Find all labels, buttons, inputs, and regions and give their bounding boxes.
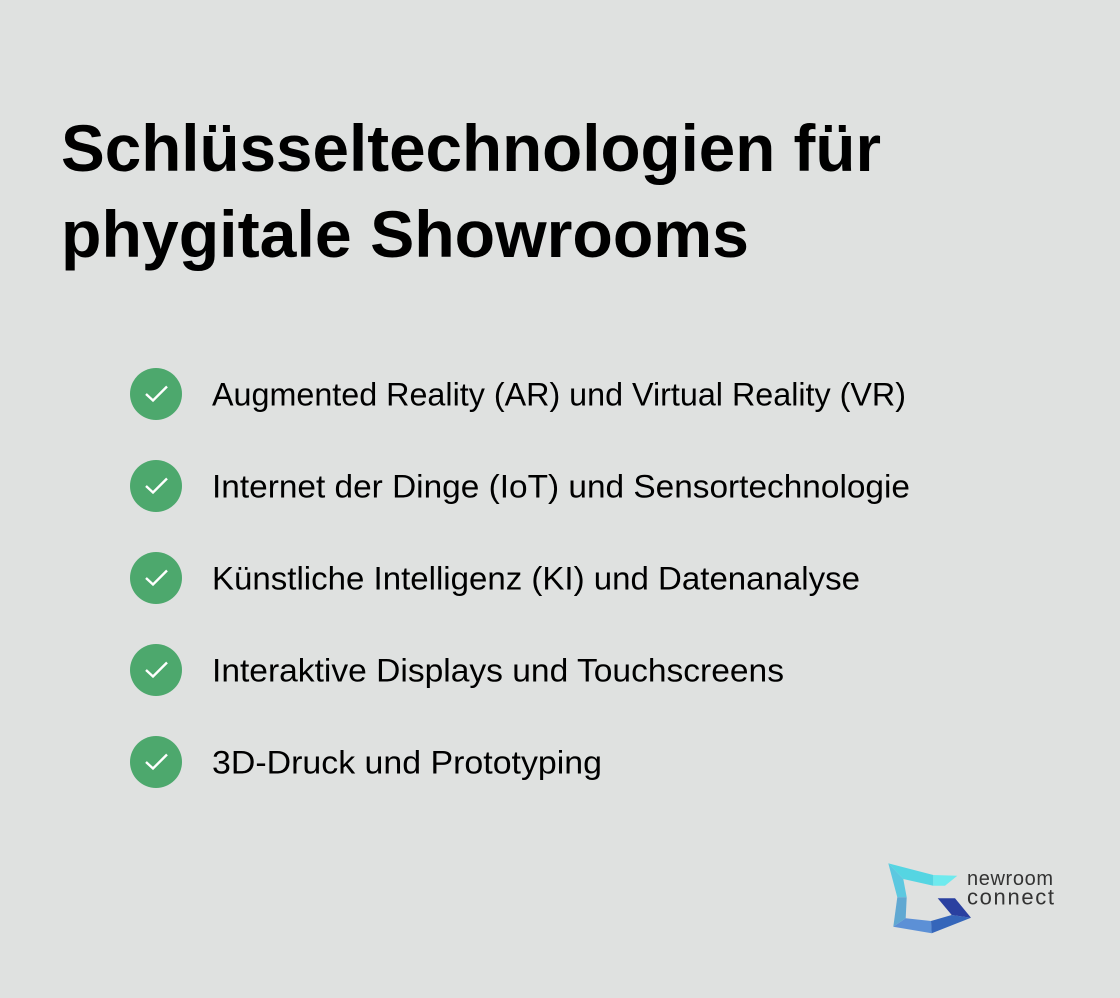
title: Schlüsseltechnologien für [61, 111, 881, 185]
item 4: displays [130, 644, 784, 696]
item 1: AR and VR: Augmented Reality (AR) und Virtual Reality (VR) [212, 376, 906, 412]
item 1: AR and VR [130, 368, 906, 420]
logo: newroom connect: newroom [967, 868, 1053, 890]
item 2: IoT: Internet der Dinge (IoT) und Sensortechnologie [212, 468, 910, 504]
logo: newroom connect [888, 863, 1054, 933]
logo: newroom connect: connect [967, 884, 1054, 910]
item 4: displays: Interaktive Displays und Touchscreens [212, 652, 784, 688]
item 5: 3D printing [130, 736, 602, 788]
item 3: KI [130, 552, 860, 604]
item 2: IoT [130, 460, 910, 512]
checklist [130, 368, 910, 788]
item 5: 3D printing: 3D-Druck und Prototyping [212, 744, 602, 780]
item 3: KI: Künstliche Intelligenz (KI) und Datenanalyse [212, 560, 860, 596]
title [61, 111, 881, 271]
title: phygitale Showrooms [61, 197, 749, 271]
